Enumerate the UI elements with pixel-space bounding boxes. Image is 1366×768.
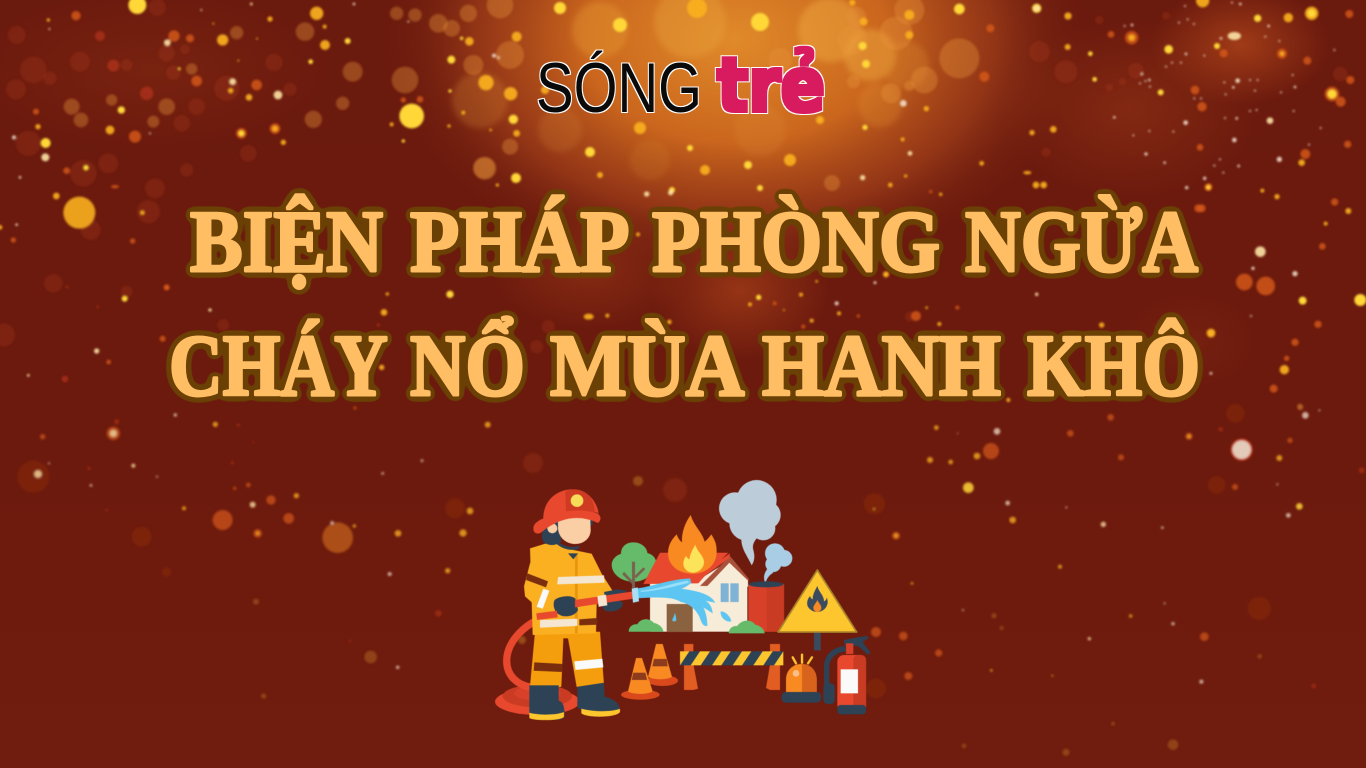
particles: middle band centre xyxy=(530,190,915,353)
face xyxy=(558,510,591,544)
logo: Sóng Trẻ xyxy=(536,41,825,129)
icon: traffic cones xyxy=(621,644,678,700)
particles: middle band right xyxy=(874,190,1215,402)
boots xyxy=(529,685,565,720)
icon: alarm beacon xyxy=(781,655,821,703)
particles: middle right xyxy=(1198,183,1366,410)
icon: bushes xyxy=(629,619,765,633)
title line 1: PHÁP xyxy=(410,194,628,291)
icon: oil barrel xyxy=(748,581,784,632)
particles: top right xyxy=(838,0,1354,190)
title line 1: NGỪA xyxy=(965,194,1198,291)
icon: hose coil xyxy=(495,614,580,715)
icon: fire extinguisher xyxy=(823,636,871,714)
jacket torso xyxy=(530,542,613,635)
particles: bottom right xyxy=(864,404,1365,756)
title xyxy=(169,193,1200,415)
icon: house xyxy=(643,553,749,632)
particles: around illustration xyxy=(518,453,687,644)
icon: barrier xyxy=(680,644,783,690)
icon: water spray xyxy=(637,578,731,626)
particles: middle band left xyxy=(164,285,454,370)
particles: bottom left xyxy=(17,406,491,699)
particles: middle left xyxy=(0,178,170,382)
title line 1: PHÒNG xyxy=(652,194,940,291)
logo wordmark: Sóng: SÓNG xyxy=(536,48,702,127)
nozzle and hose xyxy=(575,591,633,607)
title line 2: MÙA xyxy=(550,318,744,415)
title line 2: HANH xyxy=(762,318,1001,415)
icon: flame on roof xyxy=(668,515,717,574)
icon: small smoke xyxy=(764,543,792,583)
trousers xyxy=(530,632,604,688)
sleeve xyxy=(524,542,562,611)
icon: smoke cloud xyxy=(719,480,781,565)
icon: firefighter xyxy=(524,489,639,720)
particles: top left xyxy=(6,0,522,187)
title line 2: NỔ xyxy=(410,316,525,415)
title line 1: BIỆN xyxy=(190,193,383,291)
illustration: firefighter scene xyxy=(495,480,871,720)
helmet xyxy=(543,489,599,519)
logo wordmark: trẻ: trẻ xyxy=(717,41,825,129)
icon: tree xyxy=(612,542,656,592)
gloves xyxy=(554,596,578,616)
title line 2: KHÔ xyxy=(1027,317,1200,415)
hair and ear xyxy=(542,518,561,545)
background: bokeh glow over centre top xyxy=(452,0,929,180)
icon: warning sign xyxy=(778,570,857,650)
title line 2: CHÁY xyxy=(169,318,386,415)
particles: top centre xyxy=(473,0,840,193)
